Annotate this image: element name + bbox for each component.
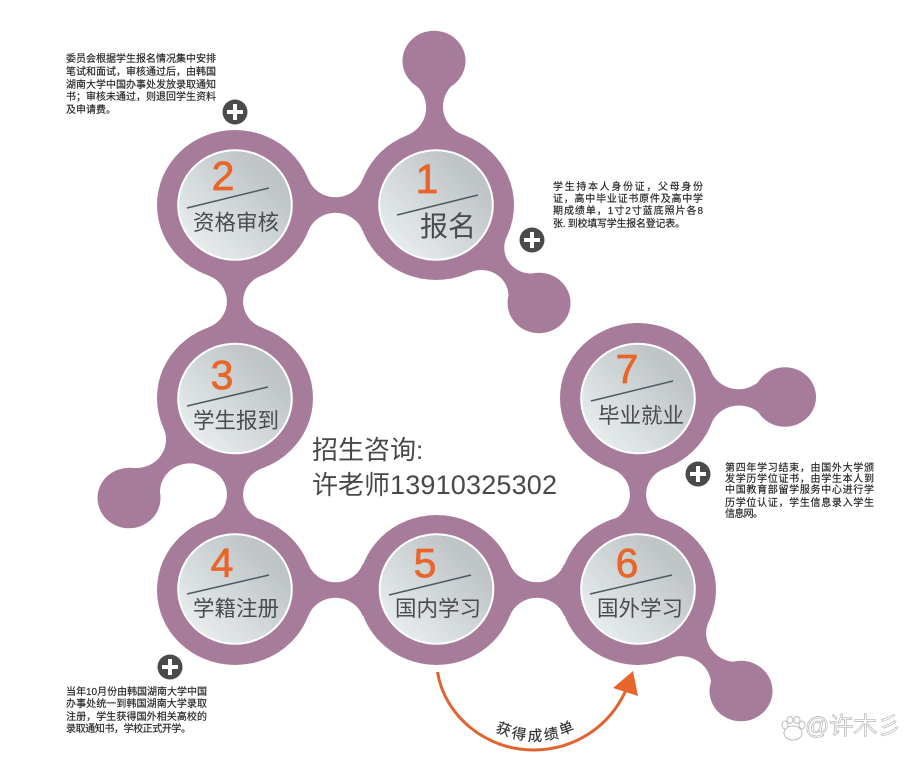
text block: step 1 details: 学生持本人身份证，父母身份 bbox=[553, 180, 703, 193]
blob of step 7 bbox=[754, 367, 816, 427]
text block: step 2 details bbox=[66, 52, 216, 116]
arrow label 获得成绩单: 绩 bbox=[543, 725, 560, 744]
text block: step 1 details: 张. 到校填写学生报名登记表。 bbox=[553, 217, 685, 230]
text block: step 7 details: 历学位认证，学生信息录入学生 bbox=[725, 496, 874, 509]
connector 6 to 7 bbox=[611, 456, 665, 533]
text block: step 1 details bbox=[553, 180, 703, 230]
text block: step 7 details bbox=[725, 461, 874, 520]
connector 3 to 4 bbox=[208, 456, 262, 533]
number 5: 5 bbox=[414, 540, 436, 586]
contact heading: 许老师13910325302 bbox=[312, 470, 557, 500]
arrow label 获得成绩单: 获 bbox=[494, 719, 513, 740]
text block: step 4 details: 录取通知书，学校正式开学。 bbox=[66, 722, 191, 735]
text block: step 2 details: 及申请费。 bbox=[66, 103, 116, 116]
icon: paw bbox=[782, 716, 805, 740]
number 1: 1 bbox=[416, 156, 438, 202]
icon: plus for step 1 bbox=[520, 228, 544, 252]
step 3: 学生报到 bbox=[157, 323, 313, 473]
arrow label 获得成绩单 bbox=[494, 718, 576, 745]
connector 1 to 2 bbox=[295, 179, 376, 231]
step 4: 学籍注册 bbox=[157, 515, 313, 665]
number 4: 4 bbox=[211, 540, 233, 586]
step 1: 报名 bbox=[358, 130, 514, 280]
molecule network backdrop bbox=[98, 31, 816, 721]
icon: plus for step 7 bbox=[686, 462, 710, 486]
blob of step 1 bbox=[508, 273, 570, 333]
text block: step 4 details bbox=[66, 685, 207, 735]
text block: step 2 details: 湖南大学中国办事处发放录取通知 bbox=[66, 78, 216, 91]
arrow label 获得成绩单: 成 bbox=[528, 728, 542, 745]
text block: step 4 details: 当年10月份由韩国湖南大学中国 bbox=[66, 685, 207, 698]
label 资格审核: 资格审核 bbox=[193, 211, 279, 235]
neck to blob of step 7 bbox=[698, 371, 771, 424]
arrow label 获得成绩单: 得 bbox=[510, 725, 527, 744]
label 毕业就业: 毕业就业 bbox=[598, 404, 684, 428]
icon: plus for step 2 bbox=[222, 100, 248, 124]
icon: plus for step 4 bbox=[158, 654, 182, 680]
label 学籍注册: 学籍注册 bbox=[193, 597, 279, 621]
text block: step 4 details: 注册，学生获得国外相关高校的 bbox=[66, 710, 207, 723]
arrow label 获得成绩单: 单 bbox=[557, 718, 576, 739]
number 2: 2 bbox=[212, 153, 234, 199]
text block: step 7 details: 第四年学习结束，由国外大学颁 bbox=[725, 461, 874, 474]
step 5: 国内学习 bbox=[358, 515, 514, 665]
step 6: 国外学习 bbox=[560, 515, 716, 665]
text block: step 1 details: 证，高中毕业证书原件及高中学 bbox=[553, 192, 703, 205]
text block: step 7 details: 信息网。 bbox=[725, 507, 763, 520]
connector 5 to 6 bbox=[496, 564, 578, 616]
neck to blob of step 6 bbox=[660, 612, 751, 700]
connector 2 to 3 bbox=[208, 263, 262, 340]
step 7: 毕业就业 bbox=[560, 323, 716, 473]
neck to blob of step 3 bbox=[121, 419, 212, 506]
step 2: 资格审核 bbox=[157, 130, 313, 280]
number 3: 3 bbox=[211, 352, 233, 398]
text block: step 7 details: 发学历学位证书，由学生本人到 bbox=[725, 472, 874, 485]
label 学生报到: 学生报到 bbox=[193, 409, 279, 433]
arrow: from step 5 to step 6 bbox=[438, 671, 638, 750]
neck to blob of step 1 bbox=[460, 227, 547, 311]
text block: step 7 details: 中国教育部留学服务中心进行学 bbox=[725, 483, 874, 496]
label 国外学习: 国外学习 bbox=[597, 597, 683, 621]
number 7: 7 bbox=[616, 346, 638, 392]
text block: step 1 details: 期成绩单，1寸2寸蓝底照片各8 bbox=[553, 204, 703, 217]
text block: step 2 details: 笔试和面试，审核通过后，由韩国 bbox=[66, 65, 216, 78]
label 报名: 报名 bbox=[420, 211, 476, 242]
contact heading: 招生咨询: bbox=[312, 435, 423, 465]
blob of step 6 bbox=[710, 661, 772, 721]
number 6: 6 bbox=[616, 540, 638, 586]
text block: step 2 details: 委员会根据学生报名情况集中安排 bbox=[66, 52, 216, 65]
contact heading bbox=[312, 435, 557, 500]
blob of step 3 bbox=[98, 468, 160, 528]
watermark: @许木彡 bbox=[805, 713, 901, 740]
neck to top blob bbox=[406, 74, 464, 148]
text block: step 2 details: 书；审核未通过，则退回学生资料 bbox=[66, 90, 216, 103]
text block: step 4 details: 办事处统一到韩国湖南大学录取 bbox=[66, 697, 207, 710]
connector 4 to 5 bbox=[295, 564, 376, 616]
label 国内学习: 国内学习 bbox=[395, 597, 481, 621]
top blob bbox=[402, 31, 466, 91]
